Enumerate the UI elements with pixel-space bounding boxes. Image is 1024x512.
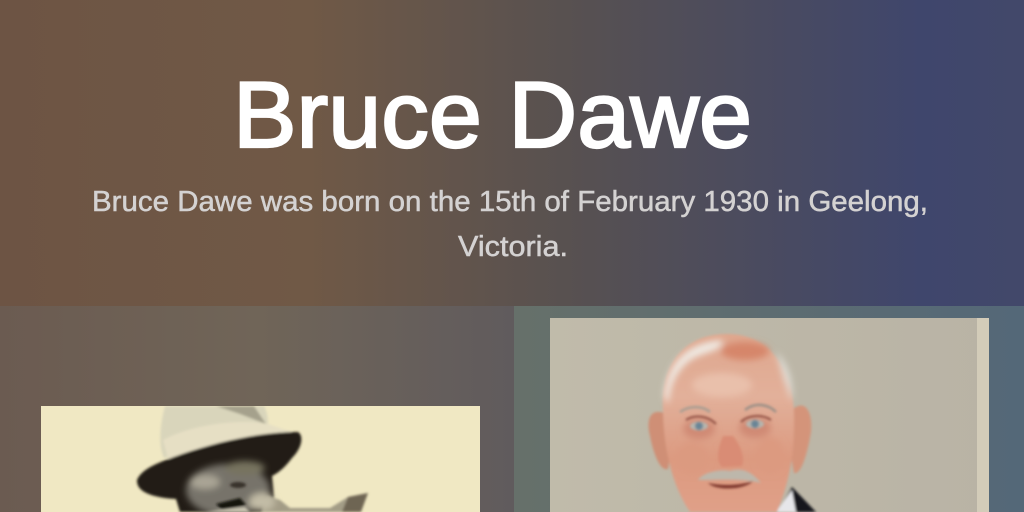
photo: elderly man smiling <box>550 318 989 512</box>
subtitle: Bruce Dawe was born on the 15th of February 1930 in Geelong, <box>92 186 928 218</box>
header panel <box>0 0 1024 306</box>
suit <box>786 486 817 512</box>
brows <box>680 407 710 412</box>
moustache <box>698 470 761 483</box>
nose <box>718 436 743 467</box>
eye sockets <box>683 419 715 439</box>
cheeks <box>676 442 708 474</box>
hat brim <box>137 432 301 512</box>
panel: right photo <box>514 306 1024 512</box>
mouth <box>708 481 753 488</box>
ears <box>649 412 674 469</box>
face <box>186 461 275 512</box>
panel: left photo <box>0 306 514 512</box>
photo: man in hat with dog <box>41 406 480 512</box>
right eye <box>746 420 764 428</box>
left eye <box>690 422 708 430</box>
title: Bruce Dawe <box>233 62 752 167</box>
dog <box>260 495 348 512</box>
hat crown <box>160 406 268 458</box>
white hair <box>664 340 722 405</box>
scalp marks <box>721 342 769 360</box>
subtitle: Victoria. <box>458 231 568 263</box>
head <box>663 334 794 512</box>
eyelid creases <box>686 417 716 424</box>
subtitle <box>92 186 928 263</box>
